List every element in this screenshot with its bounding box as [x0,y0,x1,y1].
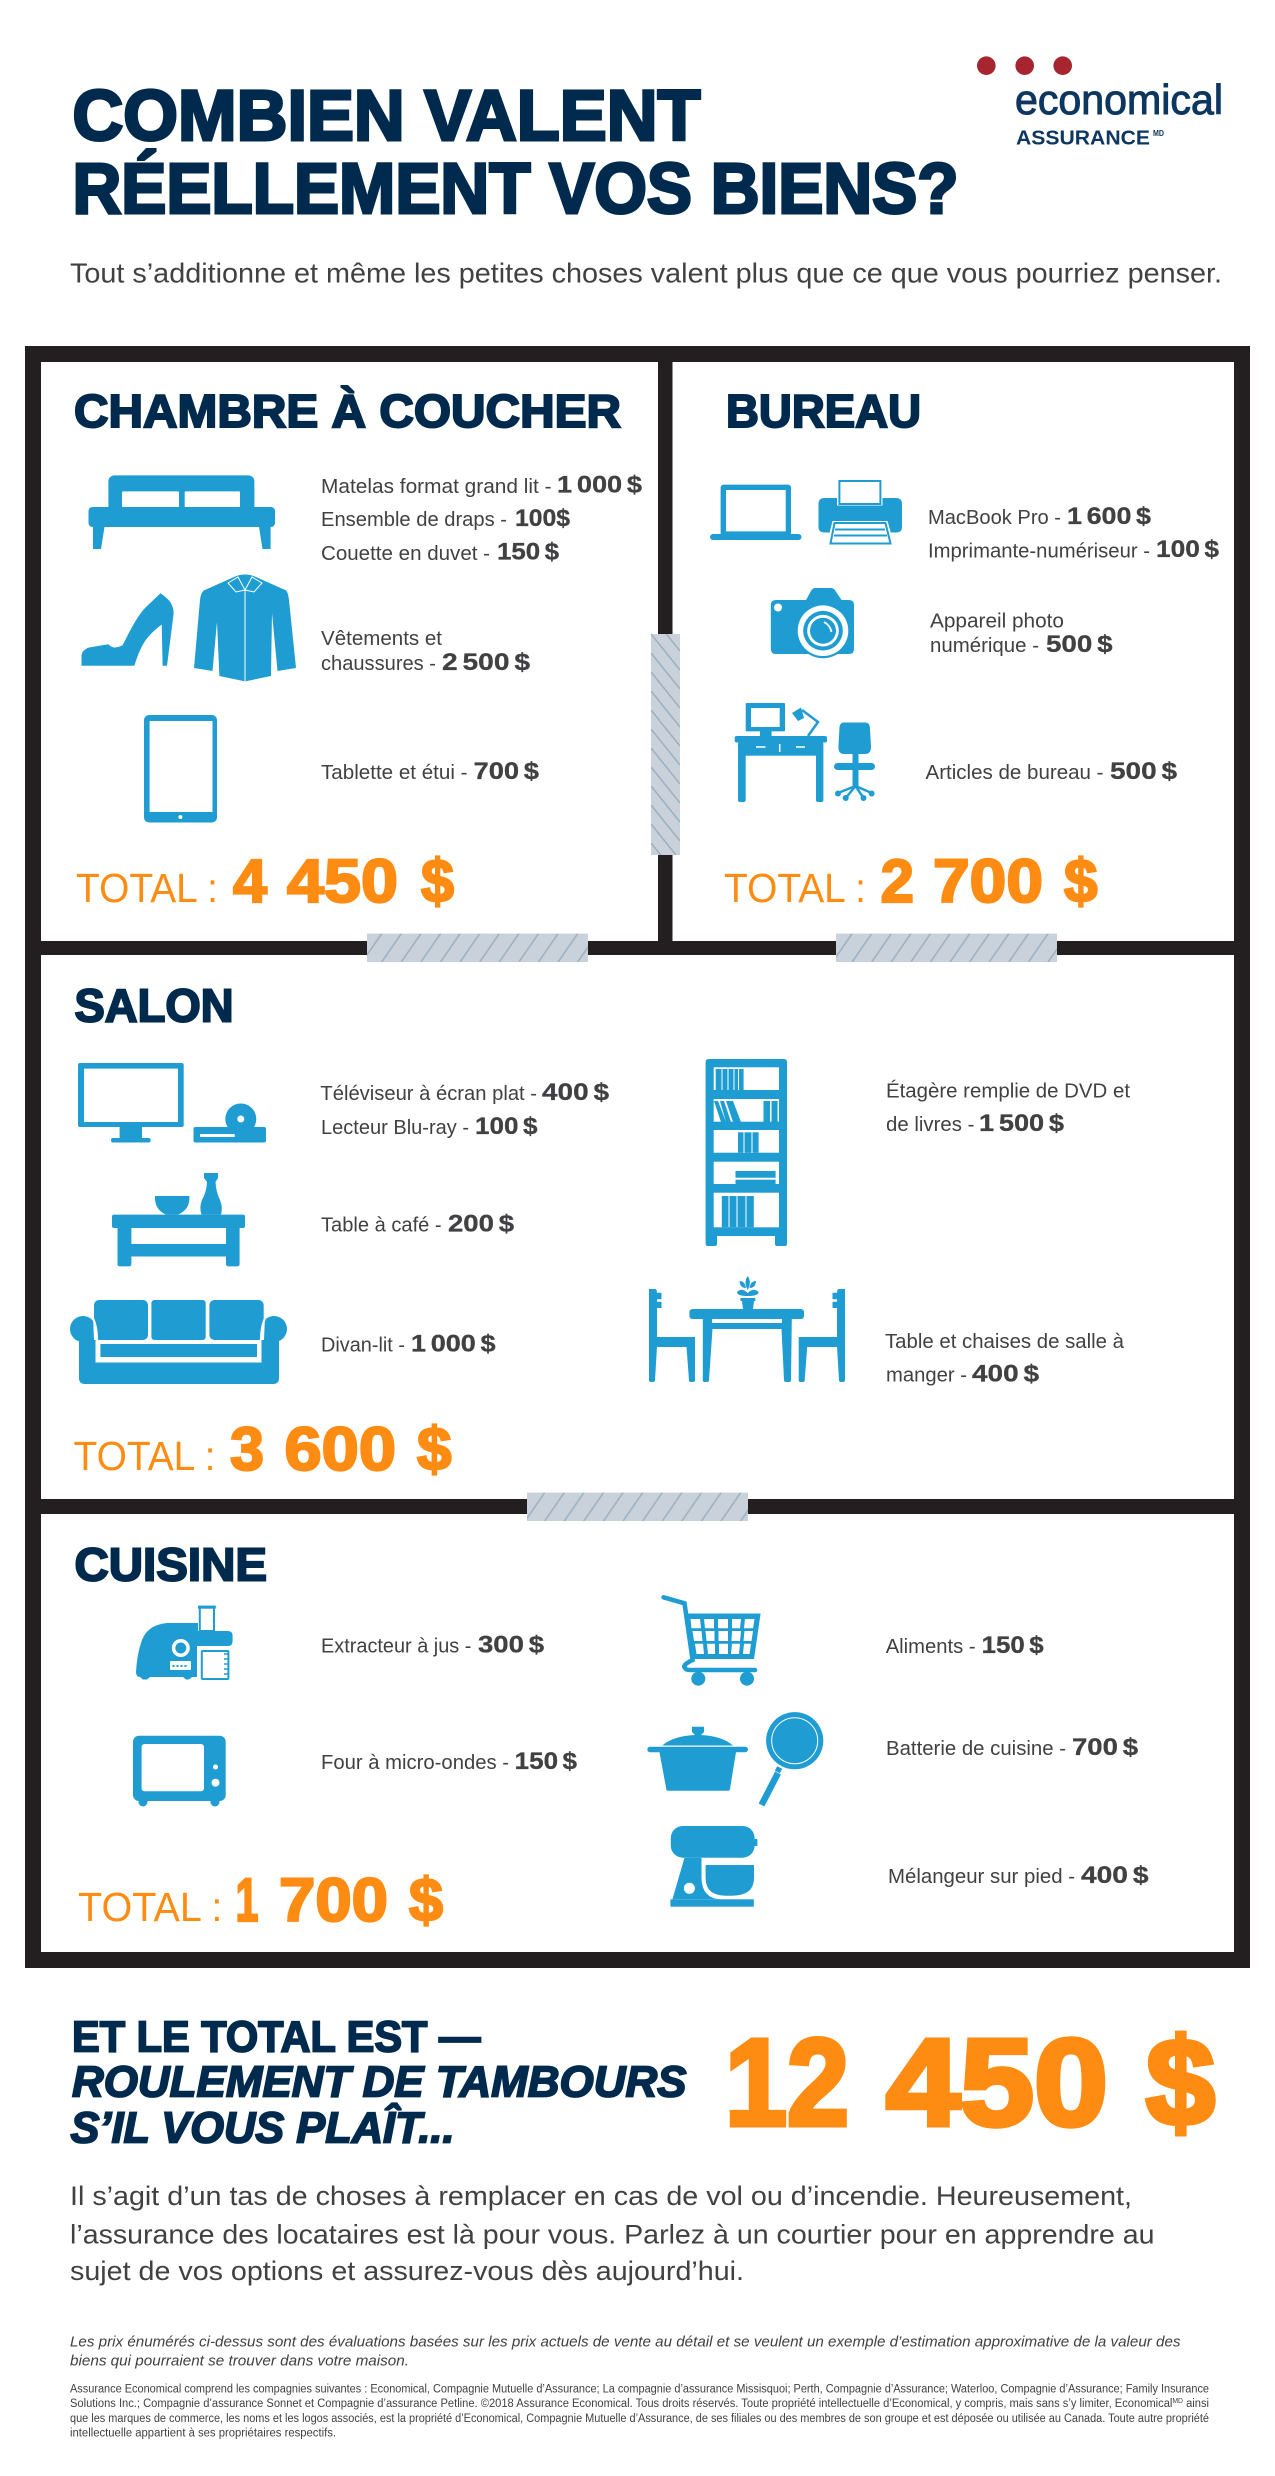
total: salon: 600 [284,1415,396,1483]
heading: bureau: BUREAU [726,385,921,437]
text block: legal fine print [70,2384,1209,2440]
house frame walls [25,346,1250,1968]
total: cuisine [78,1866,443,1934]
total: chambre: 450 [287,847,398,915]
item: table à café [321,1210,515,1238]
text block: legal fine print: intellectuelle appartient à ses propriétaires respectifs. [70,2428,336,2440]
item: matelas, draps, couette: 100$ [515,505,571,532]
icon: television [78,1063,184,1142]
item: téléviseur et blu-ray: Téléviseur à écran plat - [320,1082,537,1105]
total: bureau: $ [1064,847,1098,915]
window: bedroom-salon wall [367,934,588,962]
item: table à café: Table à café - [321,1214,442,1236]
item: matelas, draps, couette [321,472,643,566]
logo: economical assurance: ASSURANCE [1016,126,1150,149]
total: salon [74,1415,452,1483]
item: four à micro-ondes: 150 $ [515,1748,578,1775]
total: bureau: 700 [933,847,1043,915]
item: four à micro-ondes: Four à micro-ondes - [321,1751,509,1774]
item: macbook et imprimante [928,503,1220,563]
panel: bureau [672,362,1234,941]
item: batterie de cuisine [886,1734,1139,1761]
window: salon-cuisine wall [527,1493,748,1521]
item: matelas, draps, couette: Ensemble de draps - [321,508,507,531]
item: extracteur à jus: Extracteur à jus - [321,1634,471,1657]
text block: legal fine print: que les marques de commerce, les noms et les logos associés, est la propriété d’Economical, Compagnie Mutuelle d’Assurance, de ses filiales ou des membres de son groupe et est déposée ou utilisée au Canada. Toute autre propriété [70,2413,1209,2425]
total: salon: 3 [230,1415,264,1483]
logo: economical assurance [977,56,1223,149]
item: table et chaises: 400 $ [972,1361,1040,1388]
item: articles de bureau: 500 $ [1110,758,1178,785]
item: étagère: de livres - [886,1113,974,1136]
grand total [725,2014,1215,2152]
icon: sofa [70,1300,287,1384]
item: tablette et étui [321,758,540,785]
item: aliments: Aliments - [886,1635,976,1658]
item: table et chaises: Table et chaises de salle à [885,1330,1125,1353]
panel: chambre à coucher [41,362,658,941]
item: étagère [886,1080,1130,1137]
item: matelas, draps, couette: Matelas format grand lit - [321,475,552,498]
item: mélangeur sur pied: Mélangeur sur pied - [888,1865,1075,1888]
panel: cuisine [41,1514,1234,1952]
total: chambre: $ [421,847,454,915]
total: salon: TOTAL : [74,1433,216,1479]
item: étagère: Étagère remplie de DVD et [886,1080,1130,1103]
total: cuisine: TOTAL : [78,1884,222,1930]
icon: stand mixer [670,1826,757,1907]
icon: coffee table [112,1173,245,1266]
text block: price disclaimer [70,2335,1180,2370]
total: bureau [724,847,1098,915]
icon: laptop [710,485,802,540]
icon: jacket [194,574,296,681]
item: appareil photo [930,610,1113,658]
item: divan-lit [321,1330,496,1357]
item: étagère: 1 500 $ [979,1110,1065,1137]
icon: camera [771,588,854,658]
item: vêtements et chaussures [321,627,531,676]
text block: conclusion: l’assurance des locataires est là pour vous. Parlez à un courtier pour en apprendre au [70,2219,1154,2249]
text block: conclusion: Il s’agit d’un tas de choses à remplacer en cas de vol ou d’incendie. Heureusement, [70,2181,1132,2211]
item: téléviseur et blu-ray: 100 $ [475,1113,538,1140]
subtitle: Tout s’additionne et même les petites choses valent plus que ce que vous pourriez penser. [70,258,1222,289]
heading: et le total est: ROULEMENT DE TAMBOURS [72,2059,686,2107]
item: mélangeur sur pied [888,1862,1149,1889]
grand total: $ [1146,2014,1215,2152]
heading: salon: SALON [74,980,234,1032]
item: divan-lit: Divan-lit - [321,1333,405,1356]
item: articles de bureau [926,758,1178,785]
item: aliments: 150 $ [982,1632,1044,1659]
text block: conclusion [70,2181,1154,2286]
icon: desk, lamp and chair [735,703,875,802]
item: vêtements et chaussures: 2 500 $ [442,649,531,676]
logo: economical assurance: MD [1153,129,1164,138]
icon: bookcase [706,1059,787,1246]
window: bureau-salon wall [836,934,1057,962]
panel: salon [41,955,1234,1499]
item: tablette et étui: 700 $ [474,758,540,785]
title: RÉELLEMENT VOS BIENS? [72,150,958,229]
item: téléviseur et blu-ray [320,1079,610,1140]
item: extracteur à jus [321,1631,545,1658]
item: divan-lit: 1 000 $ [411,1330,496,1357]
item: extracteur à jus: 300 $ [478,1631,545,1658]
total: cuisine: 700 [279,1866,388,1934]
item: matelas, draps, couette: 150 $ [497,538,560,566]
item: appareil photo: 500 $ [1046,631,1113,658]
item: appareil photo: numérique - [930,634,1039,657]
item: téléviseur et blu-ray: 400 $ [542,1079,610,1106]
item: matelas, draps, couette: Couette en duvet - [321,542,490,565]
text block: conclusion: sujet de vos options et assurez-vous dès aujourd’hui. [70,2256,744,2286]
total: bureau: TOTAL : [724,865,866,911]
total: chambre [76,847,454,915]
item: vêtements et chaussures: chaussures - [321,652,436,675]
item: table et chaises [885,1330,1125,1388]
title: COMBIEN VALENT [72,77,700,156]
window: bedroom-bureau wall [651,634,680,855]
item: batterie de cuisine: 700 $ [1072,1734,1139,1761]
item: table à café: 200 $ [448,1210,515,1238]
text block: legal fine print: MD [1172,2398,1183,2405]
icon: shopping cart [664,1597,761,1686]
item: mélangeur sur pied: 400 $ [1081,1862,1149,1889]
item: macbook et imprimante: 100 $ [1156,536,1220,563]
grand total: 12 [725,2014,849,2152]
item: macbook et imprimante: Imprimante-numériseur - [928,540,1150,562]
icon: microwave [133,1736,226,1806]
logo: economical assurance: economical [1015,76,1223,123]
icon: tablet [144,715,217,822]
title [72,77,958,229]
icon: bed [88,475,275,549]
icon: blu-ray player [194,1104,266,1142]
total: chambre: 4 [233,847,267,915]
heading: cuisine: CUISINE [74,1538,267,1590]
total: cuisine: $ [409,1866,443,1934]
heading: et le total est [70,2014,686,2153]
text block: legal fine print: Solutions Inc.; Compagnie d’assurance Sonnet et Compagnie d’assurance Petline. ©2018 Assurance Economical. Tous droits réservés. Toute propriété intellectuelle d’Economical, y compris, mais sans s’y limiter, Economical [70,2398,1208,2410]
item: articles de bureau: Articles de bureau - [926,761,1104,784]
text block: legal fine print: Assurance Economical comprend les compagnies suivantes : Economical, Compagnie Mutuelle d’Assurance; La compagnie d’assurance Missisquoi; Perth, Compagnie d’Assurance; Waterloo, Compagnie d’Assurance; Family Insurance [70,2384,1209,2396]
item: tablette et étui: Tablette et étui - [321,761,468,784]
item: macbook et imprimante: 1 600 $ [1067,503,1152,530]
text block: price disclaimer: Les prix énumérés ci-dessus sont des évaluations basées sur les prix actuels de vente au détail et se veulent un exemple d’estimation approximative de la valeur des [70,2335,1180,2351]
item: batterie de cuisine: Batterie de cuisine - [886,1737,1066,1760]
item: four à micro-ondes [321,1748,578,1775]
grand total: 450 [886,2014,1108,2152]
item: matelas, draps, couette: 1 000 $ [557,472,643,498]
text block: legal fine print: ainsi [1183,2398,1209,2410]
item: téléviseur et blu-ray: Lecteur Blu-ray - [321,1116,469,1139]
total: salon: $ [417,1415,452,1483]
item: appareil photo: Appareil photo [930,610,1064,632]
icon: high-heel shoe [82,593,174,666]
heading: et le total est: ET LE TOTAL EST — [72,2014,481,2062]
item: table et chaises: manger - [886,1364,967,1387]
total: chambre: TOTAL : [76,865,218,911]
item: vêtements et chaussures: Vêtements et [321,627,442,650]
icon: pot and frying pan [647,1712,823,1805]
item: macbook et imprimante: MacBook Pro - [928,506,1061,529]
item: aliments [886,1632,1044,1659]
icon: juicer [136,1606,233,1680]
heading: et le total est: S’IL VOUS PLAÎT... [70,2103,454,2153]
icon: dining table and chairs [649,1276,845,1382]
icon: printer [818,481,902,546]
total: bureau: 2 [880,847,914,915]
total: cuisine: 1 [236,1866,258,1934]
text block: price disclaimer: biens qui pourraient se trouver dans votre maison. [70,2354,409,2370]
heading: chambre à coucher: CHAMBRE À COUCHER [74,385,621,437]
